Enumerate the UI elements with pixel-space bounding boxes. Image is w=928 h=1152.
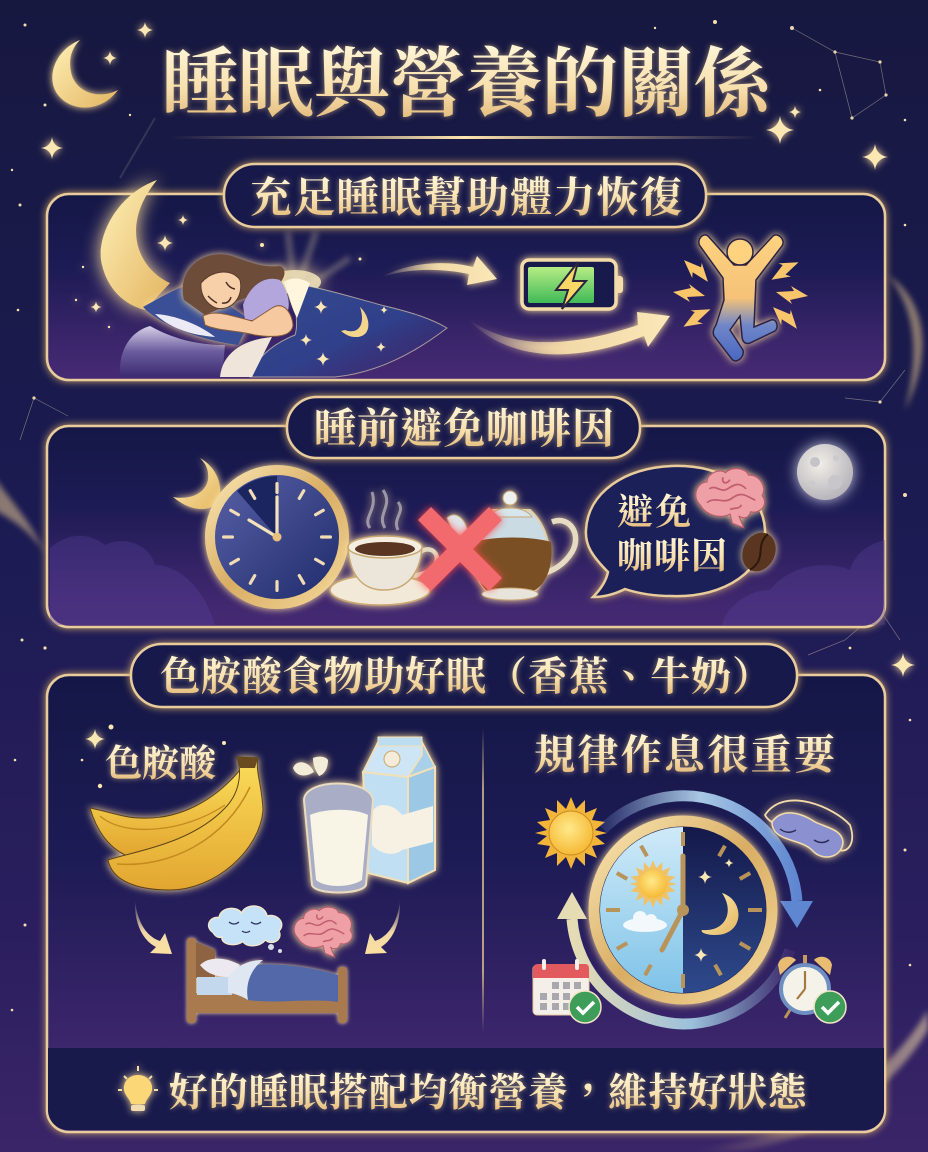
label: tryptophan: 色胺酸 bbox=[105, 743, 218, 785]
icon: bed bbox=[187, 938, 347, 1023]
heading: regular routine: 規律作息很重要 bbox=[534, 732, 837, 778]
icon: milk glass and carton bbox=[293, 737, 435, 892]
speech bubble: avoid caffeine bbox=[586, 466, 782, 597]
arrow: sleep to energy bbox=[467, 312, 670, 354]
icon: brain small bbox=[294, 907, 352, 957]
label: tryptophan bbox=[81, 724, 226, 788]
section pill: tryptophan foods bbox=[131, 644, 797, 707]
divider bbox=[482, 728, 484, 1033]
title underline bbox=[170, 136, 760, 139]
icon: day and night clock bbox=[594, 821, 772, 999]
panel: sleep recovery bbox=[47, 164, 885, 380]
icon: bananas bbox=[90, 757, 263, 890]
energy bolts bbox=[673, 253, 808, 334]
section pill: sleep recovery bbox=[224, 164, 706, 227]
icon: alarm clock with check bbox=[778, 955, 846, 1023]
small stars around sleeper bbox=[75, 215, 362, 328]
icon: light bulb bbox=[118, 1066, 158, 1111]
icon: dreaming cloud bbox=[209, 906, 282, 953]
section pill: sleep recovery: 充足睡眠幫助體力恢復 bbox=[250, 175, 682, 222]
footer text: 好的睡眠搭配均衡營養，維持好狀態 bbox=[169, 1072, 809, 1115]
section pill: tryptophan foods: 色胺酸食物助好眠（香蕉、牛奶） bbox=[160, 654, 772, 699]
bubble text bbox=[617, 492, 727, 576]
illustration: large crescent moon bbox=[101, 180, 170, 310]
icon: charging battery bbox=[522, 260, 623, 309]
routine cycle arrows bbox=[557, 796, 813, 1024]
icon: calendar with check bbox=[533, 959, 601, 1023]
icon: glass teapot bbox=[447, 491, 576, 600]
panel: tryptophan foods and routine bbox=[47, 644, 885, 1132]
icon: coffee bean bbox=[736, 527, 782, 577]
section pill: avoid caffeine bbox=[287, 397, 640, 458]
icon: full moon bbox=[797, 444, 853, 500]
icon: brain bbox=[696, 469, 765, 528]
title: 睡眠與營養的關係 bbox=[162, 43, 775, 127]
illustration: sleeping woman in bed bbox=[120, 232, 447, 377]
icon: red cross bbox=[418, 507, 502, 591]
icon: coffee cup on saucer bbox=[330, 490, 437, 605]
bubble text: 咖啡因 bbox=[617, 536, 727, 576]
icon: sleep mask bbox=[765, 800, 852, 857]
decorative stars bbox=[41, 22, 915, 677]
clouds at panel bottom bbox=[50, 536, 885, 625]
bubble text: 避免 bbox=[617, 492, 691, 532]
arrow: sleep to battery bbox=[381, 256, 497, 285]
panel: avoid caffeine bbox=[47, 397, 885, 627]
arrows: foods to sleep bbox=[135, 900, 400, 954]
icon: energetic jumping person bbox=[699, 235, 783, 361]
icon: crescent behind clock bbox=[173, 458, 220, 509]
icon: clock at ten bbox=[210, 470, 344, 604]
footer banner bbox=[48, 1048, 884, 1130]
section pill: avoid caffeine: 睡前避免咖啡因 bbox=[314, 406, 614, 453]
icon: title crescent moon bbox=[52, 40, 118, 108]
icon: sun bbox=[535, 797, 607, 869]
